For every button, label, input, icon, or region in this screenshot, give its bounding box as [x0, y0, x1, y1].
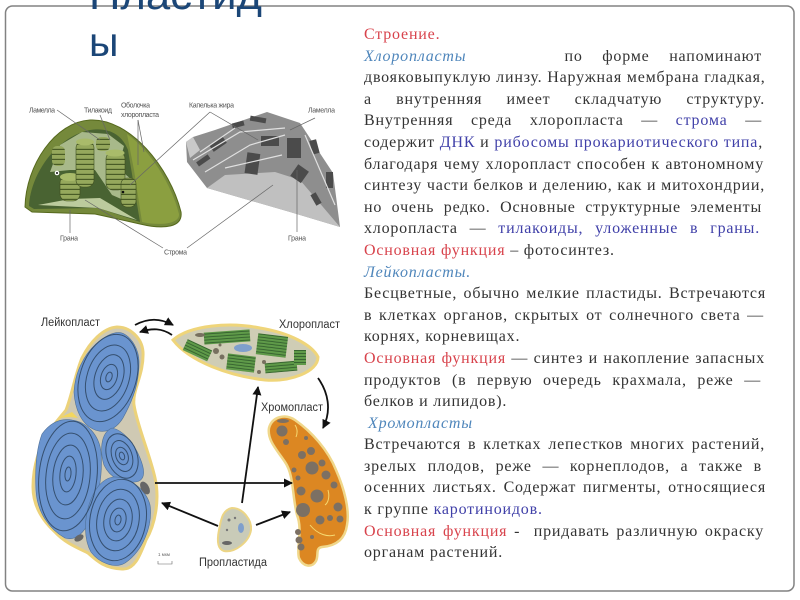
text panel [364, 26, 766, 561]
heading: structure: Строение. [364, 26, 440, 43]
paragraph: leucoplasts: в клетках органов, скрытых от солнечного света — [364, 307, 764, 324]
labels [41, 317, 341, 569]
labels: Лейкопласт [41, 317, 101, 329]
paragraph: leucoplasts: продуктов (в первую очередь крахмала, реже — [364, 372, 761, 388]
paragraph: leucoplasts [364, 264, 766, 410]
labels: Ламелла [29, 108, 55, 114]
paragraph: chromoplasts: к группе каротиноидов. [364, 501, 543, 518]
illustration: 3D chloroplast cutaway [25, 120, 181, 227]
paragraph: chloroplasts: Внутренняя среда хлоропласта — строма — [364, 112, 762, 129]
labels: Пропластида [199, 557, 268, 569]
illustration: micrograph of chloroplast [186, 112, 340, 227]
chromoplast [269, 417, 348, 566]
paragraph: chloroplasts: хлоропласта — тилакоиды, уложенные в граны. [364, 220, 760, 237]
paragraph: chloroplasts: Основная функция – фотосинтез. [364, 242, 615, 259]
labels: Капелька жира [189, 102, 234, 110]
labels: Тилакоид [84, 108, 112, 114]
paragraph: chloroplasts: а внутренняя имеет складчатую структуру. [364, 91, 765, 108]
paragraph: chromoplasts: осенних листьях. Содержат пигменты, относящиеся [364, 479, 766, 496]
paragraph: chromoplasts: Основная функция - придавать различную окраску [364, 523, 764, 540]
leucoplast [33, 327, 157, 569]
paragraph: leucoplasts: белков и липидов). [364, 393, 507, 410]
paragraph: leucoplasts: Бесцветные, обычно мелкие пластиды. Встречаются [364, 285, 766, 302]
labels: Хлоропласт [279, 319, 341, 331]
scale bar [158, 552, 172, 564]
labels: Строма [164, 250, 187, 256]
leader lines [57, 110, 315, 248]
paragraph: leucoplasts: корнях, корневищах. [364, 328, 520, 345]
paragraph: chloroplasts: двояковыпуклую линзу. Наружная мембрана гладкая, [364, 69, 766, 86]
proplastid [218, 508, 251, 551]
paragraph: leucoplasts: Лейкопласты. [364, 264, 471, 281]
figure: chloroplast structure [25, 102, 340, 256]
labels: Ламелла [308, 108, 335, 114]
paragraph: chromoplasts: Хромопласты [368, 415, 473, 432]
labels: хлоропласта [121, 112, 159, 119]
paragraph: chloroplasts: содержит ДНК и рибосомы прокариотического типа, [364, 134, 763, 151]
title [89, 0, 262, 65]
labels [29, 102, 335, 256]
paragraph: chromoplasts [364, 415, 766, 561]
figure: plastid interconversion [33, 317, 348, 569]
arrows [135, 320, 328, 526]
paragraph: chloroplasts: синтезу части белков и делению, как и митохондрии, [364, 177, 765, 194]
labels: Хромопласт [261, 402, 324, 414]
paragraph: chloroplasts: но очень редко. Основные структурные элементы [364, 199, 762, 216]
paragraph: chloroplasts: Хлоропласты по форме напоминают [364, 48, 762, 65]
paragraph: chloroplasts: благодаря чему хлоропласт способен к автономному [364, 156, 764, 173]
paragraph: chromoplasts: Встречаются в клетках лепестков многих растений, [364, 436, 765, 453]
paragraph: chromoplasts: органам растений. [364, 544, 503, 561]
labels: Грана [60, 236, 78, 242]
paragraph: chloroplasts [364, 48, 766, 259]
paragraph: chromoplasts: зрелых плодов, реже — корнеплодов, а также в [364, 458, 762, 475]
labels: Оболочка [121, 102, 150, 110]
labels: Грана [288, 236, 306, 242]
chloroplast [173, 325, 318, 380]
paragraph: leucoplasts: Основная функция — синтез и накопление запасных [364, 350, 765, 367]
scale bar: 1 мкм [158, 552, 170, 557]
title: ы [89, 19, 118, 65]
